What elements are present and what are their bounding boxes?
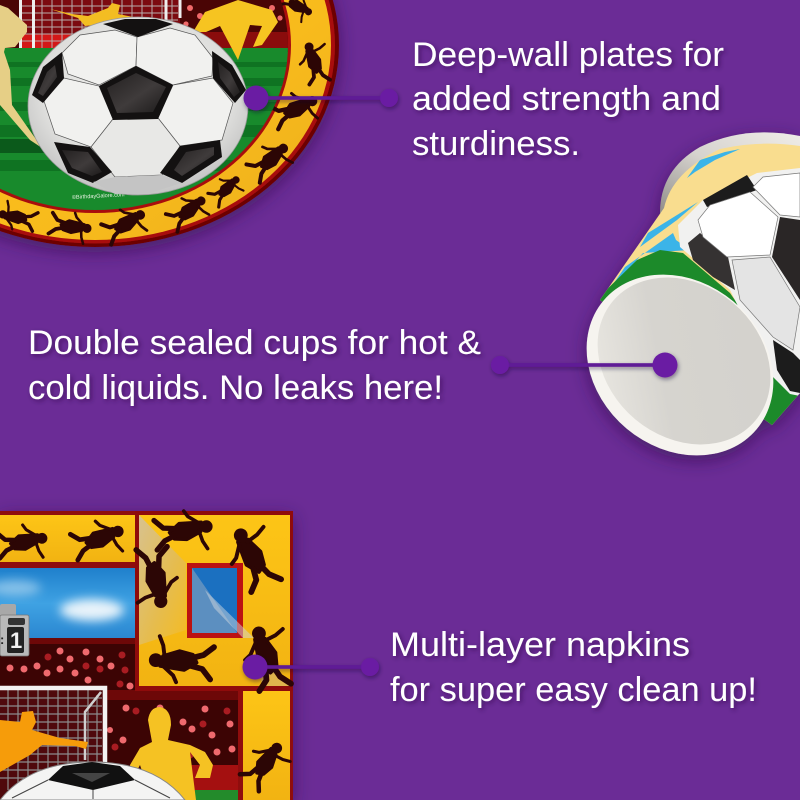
player: yellow: [193, 0, 278, 60]
right yellow strip: [243, 690, 290, 800]
panel: cup: [578, 128, 800, 469]
panel: soccer plate: [0, 0, 339, 247]
text block: Deep-wall plates for: [412, 36, 724, 74]
text block: added strength and: [412, 80, 721, 118]
panel: napkins: [0, 510, 295, 800]
goal: [0, 688, 105, 800]
sky strokes: [687, 149, 740, 178]
player: orange goalkeeper: [0, 711, 88, 772]
crowd dots: [6, 648, 236, 756]
ball wrap: [678, 168, 800, 396]
player: yellow: [130, 707, 213, 800]
callout: cups: [28, 324, 678, 407]
sky: [0, 568, 137, 639]
folded napkin corner: [135, 511, 293, 691]
window: [187, 563, 243, 638]
fold flap sky: [192, 568, 237, 633]
fold flap: [139, 515, 186, 645]
text block: sturdiness.: [412, 125, 580, 163]
napkin silhouettes: [0, 510, 295, 794]
callout: plates: [244, 36, 733, 163]
connector line: [491, 352, 678, 378]
napkin base: [0, 511, 293, 800]
soccer ball bottom: [0, 762, 185, 800]
copyright: ©BirthdayGalore.com: [72, 191, 125, 201]
callout: napkins: [242, 626, 757, 709]
grass band: [596, 250, 800, 430]
cup body: [590, 135, 800, 430]
plate scene: [0, 0, 300, 218]
text block: Multi-layer napkins: [390, 626, 690, 664]
top yellow band: [0, 515, 137, 562]
soccer ball: [28, 17, 248, 195]
black pentagons: [32, 19, 246, 183]
plate rim: [0, 0, 339, 247]
scoreboard: 1: [10, 628, 22, 653]
goal: [20, 0, 180, 48]
grass: [0, 48, 300, 218]
scoreboard: [0, 604, 29, 656]
cup rim: [660, 132, 800, 215]
text block: for super easy clean up!: [390, 671, 757, 709]
seams and white panels: [44, 28, 233, 177]
napkin field: [0, 638, 238, 800]
connector line: [244, 86, 398, 110]
connector line: [242, 654, 379, 680]
plate rim silhouettes: [0, 0, 330, 247]
pentagon highlights: [38, 62, 240, 176]
crowd dots: [183, 5, 283, 26]
player: orange: [50, 3, 138, 26]
cup base: [550, 237, 800, 493]
scoreboard: :: [0, 632, 4, 647]
text block: cold liquids. No leaks here!: [28, 369, 443, 407]
player: cream: [0, 5, 42, 148]
text block: Double sealed cups for hot &: [28, 324, 481, 362]
